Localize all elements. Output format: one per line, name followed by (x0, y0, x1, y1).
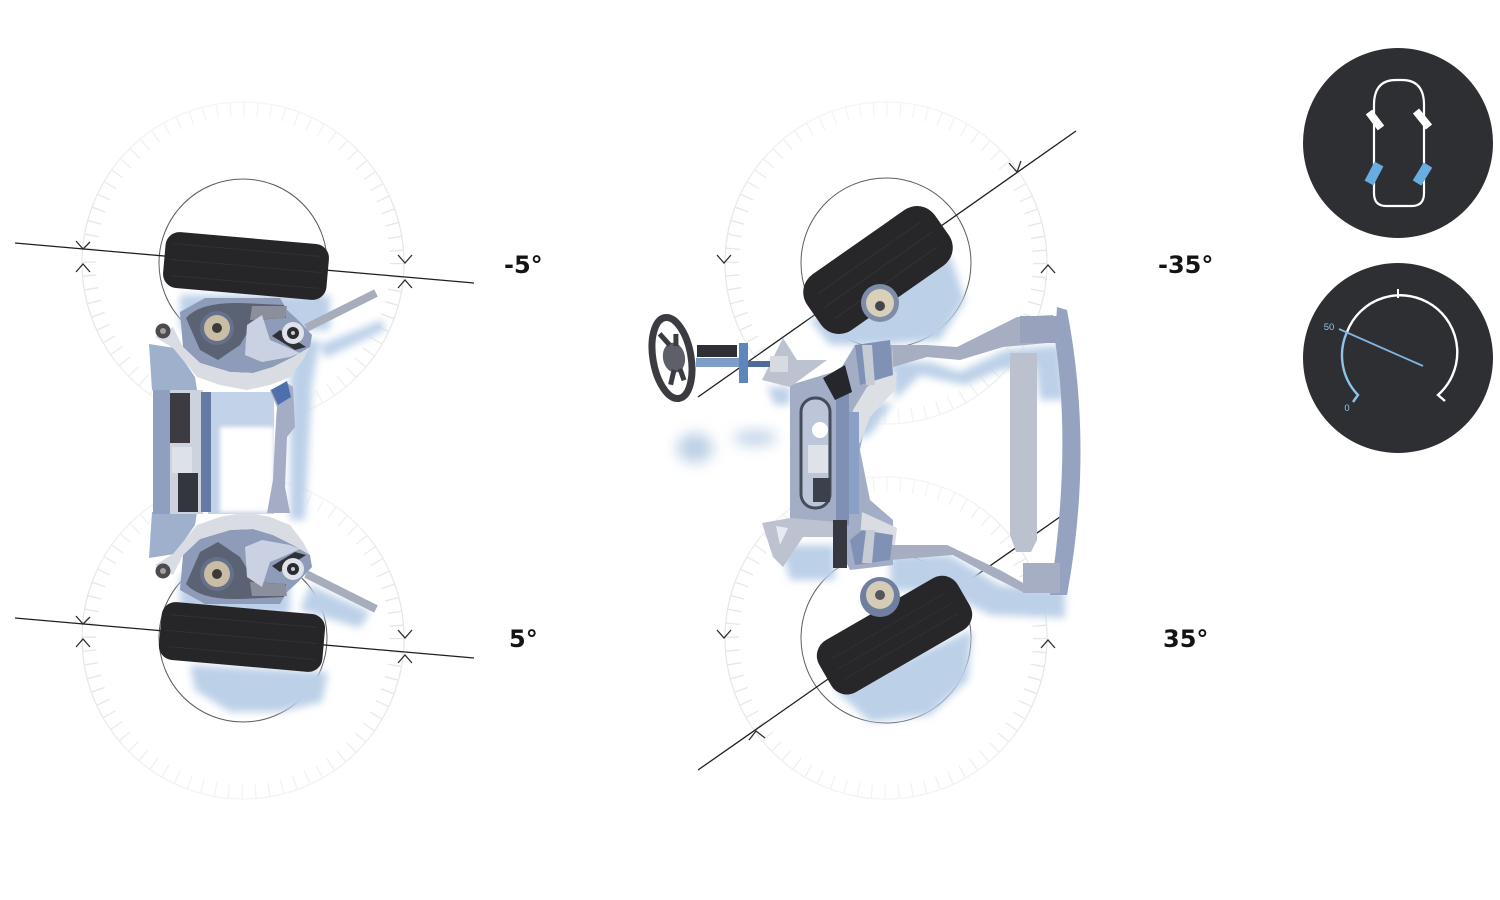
white A-arm (155, 327, 310, 390)
upper longitudinal arm (892, 315, 1058, 367)
right stripe (849, 412, 859, 514)
right rail (267, 383, 295, 513)
centre chassis (762, 307, 1080, 595)
column flange (739, 343, 748, 383)
front wheels (1369, 111, 1429, 128)
steering column (696, 343, 788, 383)
left rail (153, 390, 170, 514)
active range (1342, 332, 1358, 402)
blue spar (201, 392, 211, 512)
cross member (1010, 353, 1037, 552)
tire: right top (795, 197, 961, 343)
car outline (1374, 80, 1424, 206)
suspension knuckle cluster (180, 298, 312, 373)
left chassis lower half (mirror) (149, 512, 376, 609)
icon: car four-wheel steering (1303, 48, 1493, 238)
mount bolt (156, 324, 170, 338)
left chassis upper half (149, 293, 376, 390)
drive gear (200, 311, 234, 345)
blurred steering wheel shadow (677, 431, 777, 463)
icon: speedometer: 0 (1344, 403, 1350, 414)
knuckle dark details (186, 303, 286, 360)
angle label: -35: -35° (1158, 251, 1213, 279)
rack bellows (833, 520, 847, 568)
angle label: 5: 5° (509, 625, 538, 653)
inner loop (801, 398, 830, 508)
crescent arm lower (860, 512, 897, 545)
upper link (855, 340, 893, 385)
crescent arm upper (853, 372, 897, 443)
needle (1339, 329, 1423, 366)
wheel axis line: right bottom (698, 512, 1067, 770)
tire: left bottom (158, 601, 326, 673)
subframe body (790, 345, 893, 570)
scale labels: 50 (1324, 322, 1334, 333)
tie rod arm (306, 293, 376, 328)
icon: speedometer (1303, 263, 1493, 453)
shadow backdrop (208, 392, 274, 514)
speed scale (1347, 295, 1457, 401)
lower right plate (1023, 563, 1060, 593)
wheel axis line: left bottom (15, 618, 474, 658)
bracket hole (776, 526, 788, 545)
left frame body (153, 381, 295, 514)
lower longitudinal arm (890, 545, 1023, 592)
strut top mount: upper (861, 284, 899, 322)
steering wheel (646, 314, 698, 402)
shadows: centre chassis (767, 255, 1065, 722)
steering rack joint (823, 365, 852, 400)
lower link (850, 530, 893, 565)
angle label: -5: -5° (504, 251, 543, 279)
angle markers (76, 161, 1055, 740)
white opening (220, 427, 274, 512)
actuator (808, 445, 828, 473)
rear wheels (1369, 164, 1428, 183)
tire: left top (162, 231, 330, 301)
dial: left bottom (82, 477, 404, 799)
wheel axis line: left top (15, 243, 474, 283)
blue bracket (271, 381, 291, 405)
dark component (170, 393, 190, 443)
angle label: 35: 35° (1163, 625, 1208, 653)
tire: right bottom (810, 569, 979, 701)
centre tube (836, 390, 849, 525)
light component (172, 447, 192, 473)
column joint (770, 356, 788, 372)
upper right plate (1020, 316, 1057, 343)
dark component lower (178, 473, 198, 512)
top corner plate (149, 344, 197, 390)
strut top mount: lower (860, 577, 900, 617)
inner tray (170, 390, 203, 514)
dial: right top (725, 102, 1047, 424)
bumper beam (1050, 307, 1080, 595)
hub bearing (282, 322, 304, 344)
upper triangle bracket (762, 338, 827, 387)
lower triangle bracket (762, 518, 840, 567)
dial: left top (82, 102, 404, 424)
dial: right bottom (725, 477, 1047, 799)
loop opening (812, 422, 828, 438)
wheel axis line: right top (698, 131, 1076, 397)
shadows: left chassis (180, 295, 385, 712)
